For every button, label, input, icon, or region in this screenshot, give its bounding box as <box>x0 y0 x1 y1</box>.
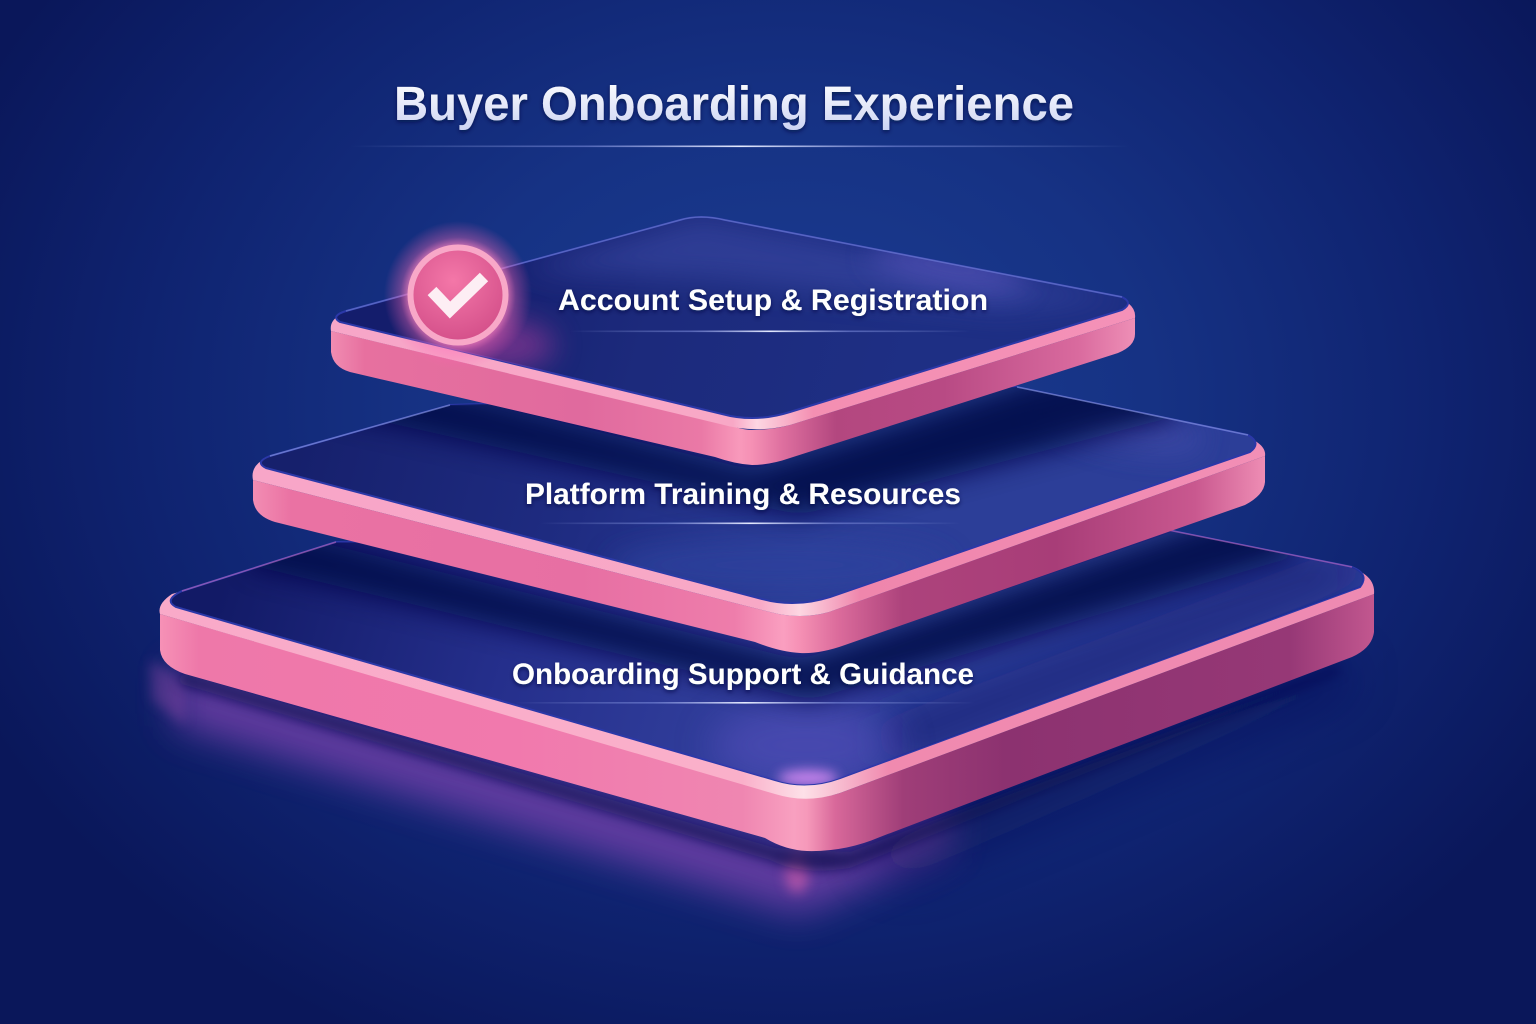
panel: account setup and registration (top tier) <box>331 216 1135 465</box>
rim <box>160 565 1374 799</box>
right side face <box>752 318 1135 465</box>
top surface <box>261 387 1256 603</box>
back edge lines <box>346 217 1122 311</box>
left side face <box>331 331 752 465</box>
tier label: Platform Training & Resources <box>525 478 961 511</box>
panel: onboarding support and guidance (bottom tier) <box>160 500 1374 851</box>
rim <box>253 433 1265 616</box>
rim <box>331 294 1135 429</box>
surface lighting <box>331 345 1208 591</box>
left side face <box>253 480 800 653</box>
title: Buyer Onboarding Experience <box>394 78 1074 131</box>
left side face <box>160 614 807 851</box>
top surface <box>171 530 1364 785</box>
tier label: Onboarding Support & Guidance <box>512 658 974 691</box>
surface lighting <box>435 216 1120 371</box>
floor glow under bottom tier <box>150 660 1350 915</box>
panel: platform training and resources (middle tier) <box>252 386 1266 654</box>
back edge lines <box>270 387 1248 456</box>
icon: check badge <box>384 221 532 369</box>
tier label: Account Setup & Registration <box>558 284 988 317</box>
right side face <box>807 594 1374 851</box>
back edge lines <box>182 530 1352 591</box>
surface lighting <box>245 531 1364 784</box>
right side face <box>800 456 1265 653</box>
top surface <box>336 217 1128 418</box>
